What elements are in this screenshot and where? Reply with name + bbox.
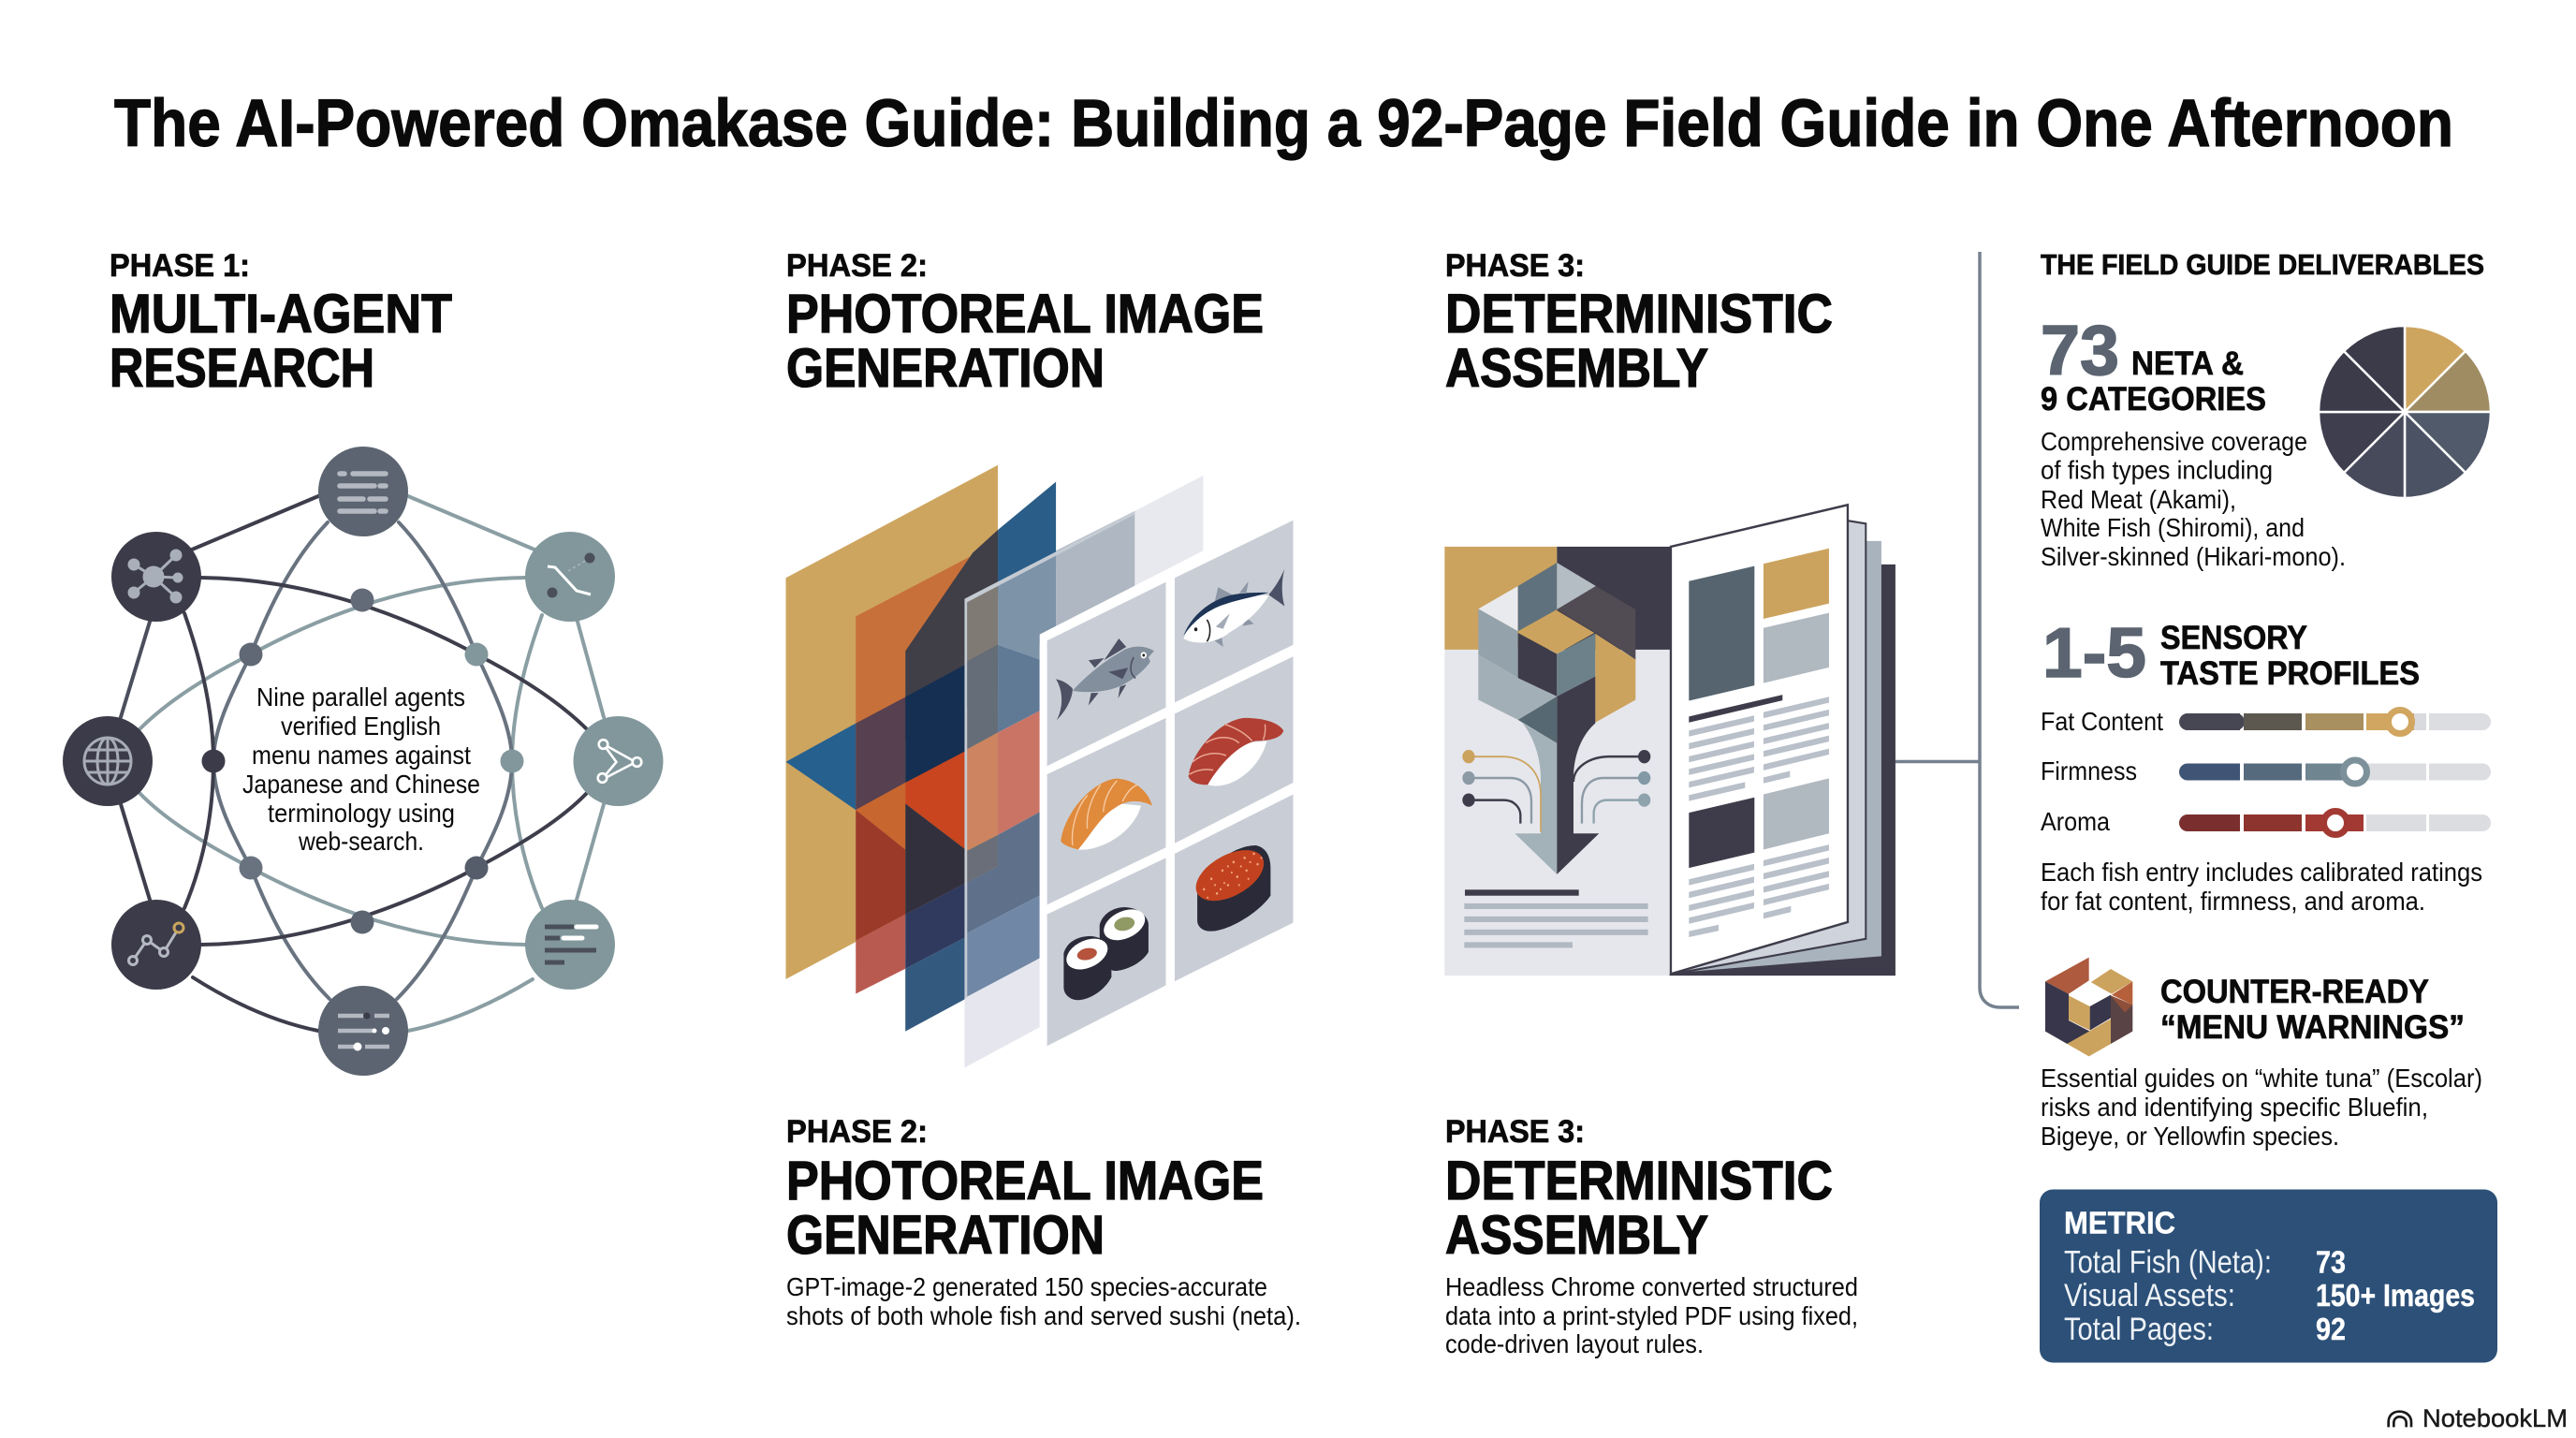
grid cells (1047, 521, 1293, 1046)
text: coverage description: Comprehensive coverage (2041, 427, 2307, 456)
heading: phase 1: MULTI-AGENT (110, 284, 452, 345)
stat: 73 neta and 9 categories: 9 CATEGORIES (2041, 381, 2266, 418)
metric card: Total Pages: (2064, 1312, 2214, 1347)
rating: aroma: Aroma (2041, 807, 2110, 836)
heading: phase 3 top: DETERMINISTIC (1445, 284, 1833, 345)
text: ratings description: for fat content, firmness, and aroma. (2041, 887, 2425, 916)
left page with cube funnel (1444, 547, 1671, 976)
layers: coloured translucent sheets (786, 465, 1056, 1032)
left page text bars (1464, 889, 1648, 947)
text: agents description: Japanese and Chinese (242, 770, 480, 799)
heading: phase 1: RESEARCH (110, 338, 374, 399)
stat: 73 neta and 9 categories: 73 (2041, 311, 2119, 389)
heading: phase 1: PHASE 1: (110, 248, 250, 284)
text: coverage description: Silver-skinned (Hikari-mono). (2041, 542, 2346, 571)
text: agents description: verified English (281, 712, 441, 741)
text: phase 3 description: Headless Chrome converted structured (1445, 1272, 1858, 1301)
icon: agent bottom-right, list (525, 900, 615, 990)
metric card (2040, 1189, 2497, 1363)
text: phase 3 description (1445, 1272, 1858, 1358)
metric card: 73 (2316, 1245, 2346, 1279)
icon: agent bottom-left, line chart (111, 900, 201, 990)
stat: 1-5 sensory taste profiles (2042, 613, 2420, 692)
stat: 73 neta and 9 categories: NETA & (2131, 345, 2244, 382)
heading: phase 3 top (1445, 248, 1833, 399)
text: phase 2 description (786, 1272, 1301, 1330)
text: menu warnings description: Bigeye, or Yellowfin species. (2041, 1122, 2339, 1151)
stat: 73 neta and 9 categories (2041, 311, 2266, 418)
metric card: Total Fish (Neta): (2064, 1245, 2272, 1281)
rating: aroma (2041, 807, 2491, 836)
text: agents description (242, 682, 480, 856)
text: agents description: web-search. (298, 827, 424, 856)
book pages (1669, 505, 1895, 976)
text: coverage description: White Fish (Shiromi), and (2041, 513, 2305, 542)
metric card: METRIC (2064, 1206, 2175, 1240)
heading: phase 2 bottom: PHASE 2: (786, 1114, 928, 1150)
text: menu warnings description (2041, 1064, 2482, 1151)
text: agents description: terminology using (268, 799, 455, 828)
connector lines (1469, 756, 1645, 832)
rating: fat content: Fat Content (2041, 707, 2163, 736)
heading: phase 3 bottom (1445, 1114, 1833, 1266)
heading: phase 2 bottom (786, 1114, 1264, 1266)
heading: phase 2 top: PHASE 2: (786, 248, 928, 284)
layers: glass sheet (964, 476, 1203, 1067)
heading: phase 2 top: GENERATION (786, 338, 1105, 399)
stat: 1-5 sensory taste profiles: 1-5 (2042, 613, 2146, 692)
stat: 1-5 sensory taste profiles: SENSORY (2160, 620, 2307, 656)
illustration: assembly page and open book (1444, 505, 1895, 976)
network diagram: nine parallel agents (63, 447, 663, 1076)
heading: phase 3 top: PHASE 3: (1445, 248, 1585, 284)
icon: menu warnings cube (2045, 958, 2132, 1056)
heading: phase 2 bottom: GENERATION (786, 1205, 1105, 1266)
icon: maki rolls (1062, 903, 1149, 1000)
rating: firmness (2041, 756, 2491, 785)
heading: counter-ready menu warnings (2160, 974, 2465, 1046)
text: ratings description: Each fish entry includes calibrated ratings (2041, 858, 2482, 887)
NotebookLM logo: NotebookLM (2422, 1404, 2568, 1432)
heading: phase 3 bottom: ASSEMBLY (1445, 1205, 1708, 1266)
icon: agent right, graph triangle (573, 716, 663, 806)
text: phase 2 description: shots of both whole fish and served sushi (neta). (786, 1301, 1301, 1330)
icon: agent top-left, hub (111, 532, 201, 622)
heading: phase 2 top (786, 248, 1264, 399)
icon: salmon nigiri (1061, 779, 1152, 850)
rating: fat content (2041, 707, 2491, 736)
heading: phase 3 top: ASSEMBLY (1445, 338, 1708, 399)
icon: agent bottom, sliders (318, 986, 408, 1076)
icon: agent top, text lines (318, 447, 408, 536)
heading: counter-ready menu warnings: COUNTER-READY (2160, 974, 2429, 1010)
heading: phase 2 bottom: PHOTOREAL IMAGE (786, 1151, 1264, 1211)
icon: tuna nigiri (1189, 718, 1283, 785)
heading: phase 2 top: PHOTOREAL IMAGE (786, 284, 1264, 345)
text: agents description: Nine parallel agents (256, 682, 465, 712)
icon: gray tuna (1056, 638, 1154, 720)
rating: firmness: Firmness (2041, 756, 2137, 785)
text: menu warnings description: risks and identifying specific Bluefin, (2041, 1093, 2428, 1122)
text: phase 3 description: data into a print-styled PDF using fixed, (1445, 1301, 1858, 1330)
icon: roe gunkan (1189, 840, 1270, 932)
text: menu warnings description: Essential guides on “white tuna” (Escolar) (2041, 1064, 2482, 1093)
text: ratings description (2041, 858, 2482, 916)
text: coverage description: Red Meat (Akami), (2041, 485, 2236, 514)
icon: bluefin tuna (1183, 568, 1284, 647)
heading: phase 1 (110, 248, 452, 399)
metric card: Visual Assets: (2064, 1278, 2235, 1313)
text: phase 3 description: code-driven layout rules. (1445, 1329, 1704, 1358)
text: agents description: menu names against (252, 741, 471, 770)
stat: 1-5 sensory taste profiles: TASTE PROFILES (2160, 655, 2420, 692)
connector bracket to deliverables (1895, 252, 2019, 1007)
text: phase 2 description: GPT-image-2 generated 150 species-accurate (786, 1272, 1267, 1301)
text: coverage description: of fish types including (2041, 455, 2273, 485)
metric card: 92 (2316, 1312, 2346, 1346)
heading: phase 3 bottom: PHASE 3: (1445, 1114, 1585, 1150)
heading: phase 3 bottom: DETERMINISTIC (1445, 1151, 1833, 1211)
text: coverage description (2041, 427, 2346, 571)
pie chart: categories (2319, 326, 2491, 498)
illustration: layered image panels with fish and sushi (786, 465, 1296, 1067)
icon: agent top-right, route (525, 532, 615, 622)
heading: counter-ready menu warnings: “MENU WARNINGS” (2160, 1009, 2465, 1046)
metric card: 150+ Images (2316, 1278, 2475, 1313)
icon: agent left, globe (63, 716, 153, 806)
heading: deliverables: THE FIELD GUIDE DELIVERABLES (2041, 248, 2484, 281)
